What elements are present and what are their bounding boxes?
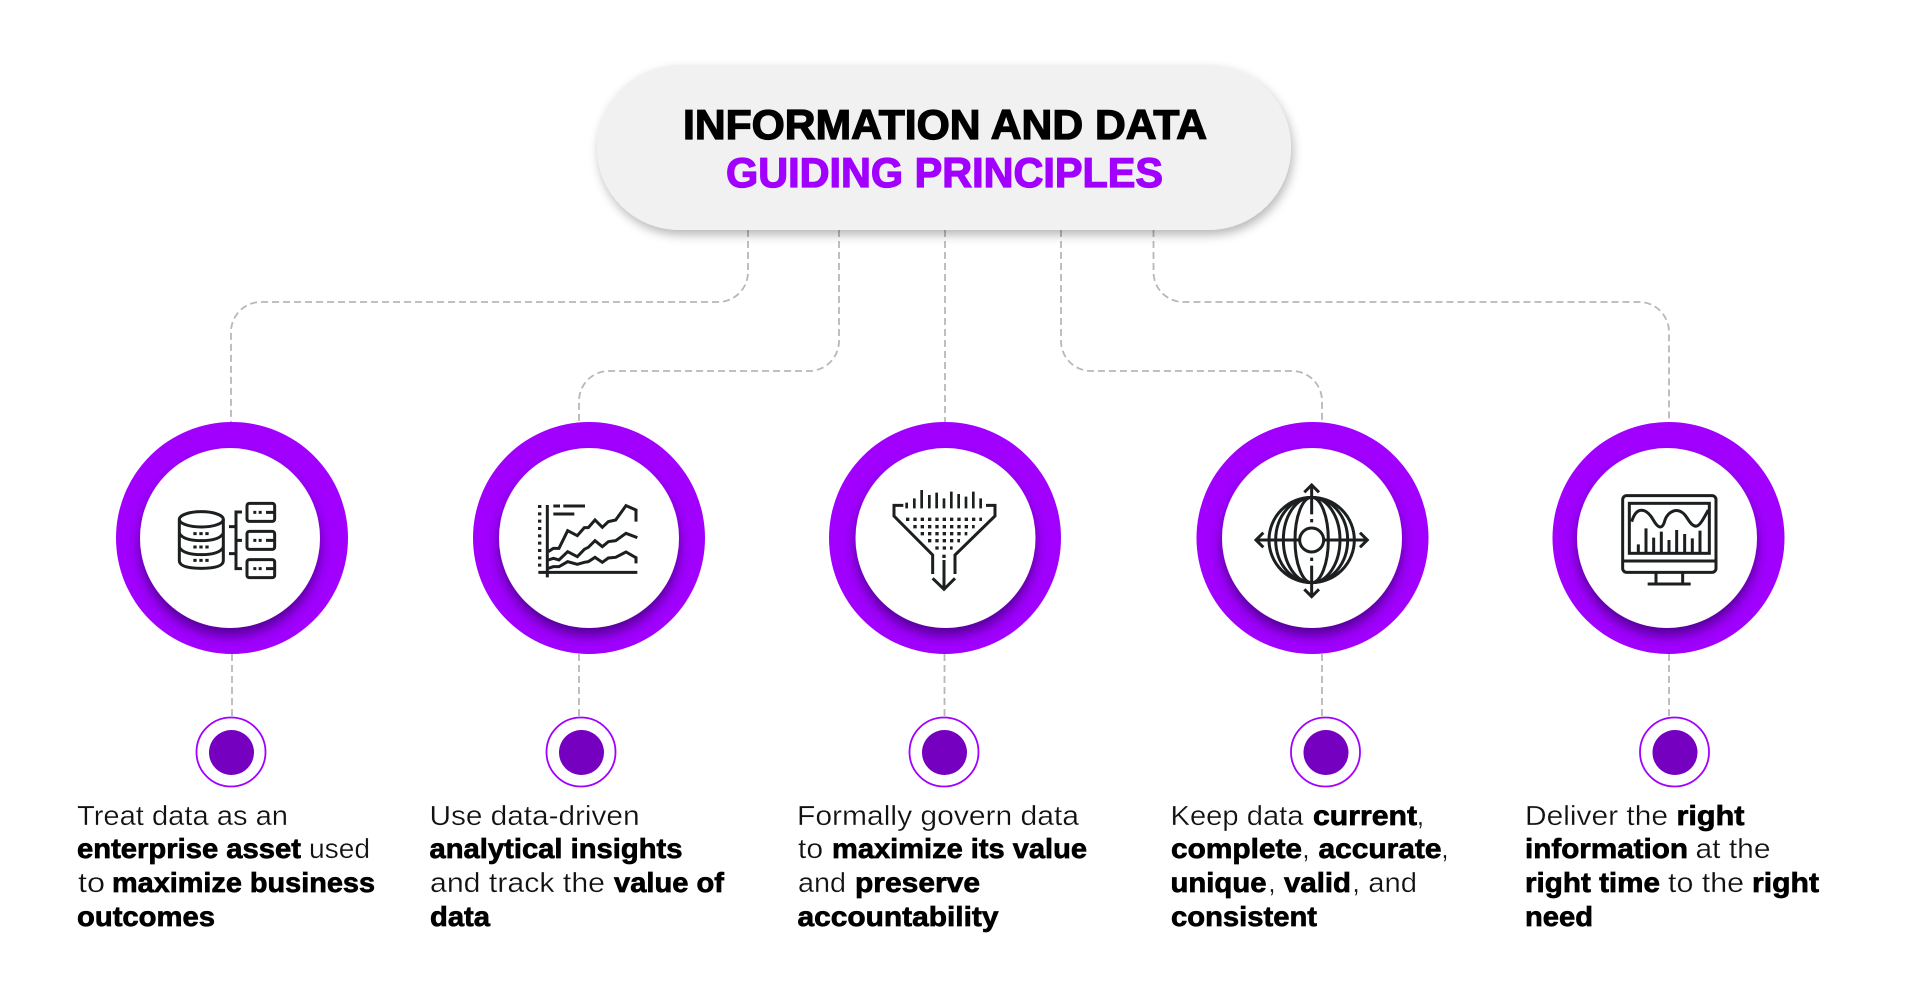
text: principle 3	[797, 800, 1087, 932]
connector: title to circle 1	[231, 230, 748, 717]
icon: line chart	[538, 505, 637, 577]
text: principle 5: right	[1676, 800, 1744, 831]
text: principle 4: unique	[1170, 867, 1266, 898]
text: principle 2	[430, 800, 725, 932]
marker dot 3	[910, 718, 978, 786]
text: principle 1: Treat data as an	[77, 800, 288, 831]
panel: principle 4	[1061, 230, 1449, 932]
text: principle 4: ,	[1302, 833, 1310, 864]
marker dot 1	[196, 718, 266, 786]
panel: principle 3	[797, 230, 1087, 932]
text: principle 3: to	[798, 833, 823, 864]
text: principle 3: accountability	[798, 901, 999, 932]
connector: title to circle 3	[944, 230, 946, 717]
icon: monitor with charts	[1623, 496, 1716, 584]
text: principle 4: ,	[1441, 833, 1449, 864]
text: principle 1: outcomes	[77, 901, 215, 932]
text: principle 3: Formally govern data	[797, 800, 1079, 831]
text: principle 1: used	[309, 833, 370, 864]
text: principle 4: valid	[1284, 867, 1351, 898]
panel: principle 1	[77, 230, 748, 932]
panel: principle 5	[1154, 230, 1819, 932]
text: principle 4: complete	[1171, 833, 1302, 864]
text: principle 2: and track the	[430, 867, 605, 898]
text: principle 4: Keep data	[1170, 800, 1304, 831]
text: principle 4: ,	[1416, 800, 1424, 831]
marker dot 2	[546, 718, 616, 786]
text: principle 1: maximize business	[112, 867, 375, 898]
icon: database with records	[179, 503, 275, 578]
ring: circle 5	[1552, 422, 1784, 654]
text: principle 5: information	[1525, 833, 1688, 864]
ring: circle 4	[1196, 422, 1428, 654]
text: principle 2: Use data-driven	[430, 800, 640, 831]
text: principle 4: consistent	[1171, 901, 1317, 932]
subtitle: guiding principles: GUIDING PRINCIPLES	[726, 149, 1163, 196]
ring: circle 3	[829, 422, 1061, 654]
text: principle 5: right time	[1525, 867, 1660, 898]
text: principle 2: analytical insights	[430, 833, 682, 864]
text: principle 3: preserve	[855, 867, 980, 898]
text: principle 2: value of	[614, 867, 725, 898]
title: information and data: INFORMATION AND DATA	[683, 101, 1207, 148]
text: principle 5: need	[1525, 901, 1593, 932]
text: principle 4	[1170, 800, 1449, 932]
text: principle 1	[77, 800, 375, 932]
ring: circle 2	[473, 422, 705, 654]
text: principle 5: right	[1752, 867, 1819, 898]
text: principle 5: to the	[1668, 867, 1744, 898]
marker dot 4	[1291, 718, 1360, 786]
text: principle 5: at the	[1696, 833, 1770, 864]
text: principle 1: enterprise asset	[77, 833, 301, 864]
icon: globe with arrows	[1256, 485, 1367, 597]
connector: title to circle 4	[1061, 230, 1322, 717]
text: principle 4: accurate	[1318, 833, 1442, 864]
panel: principle 2	[430, 230, 839, 932]
text: principle 3: and	[798, 867, 846, 898]
text: principle 4: current	[1313, 800, 1417, 831]
text: principle 2: data	[430, 901, 490, 932]
title pill	[597, 65, 1291, 230]
text: principle 3: maximize its value	[832, 833, 1087, 864]
ring: circle 1	[116, 422, 348, 654]
text: principle 5	[1525, 800, 1819, 932]
connector: title to circle 5	[1154, 230, 1669, 717]
icon: data funnel	[894, 490, 995, 589]
text: principle 4: , and	[1352, 867, 1417, 898]
text: principle 5: Deliver the	[1525, 800, 1668, 831]
text: principle 4: ,	[1268, 867, 1276, 898]
connector: title to circle 2	[579, 230, 839, 717]
marker dot 5	[1640, 718, 1709, 786]
text: principle 1: to	[78, 867, 105, 898]
